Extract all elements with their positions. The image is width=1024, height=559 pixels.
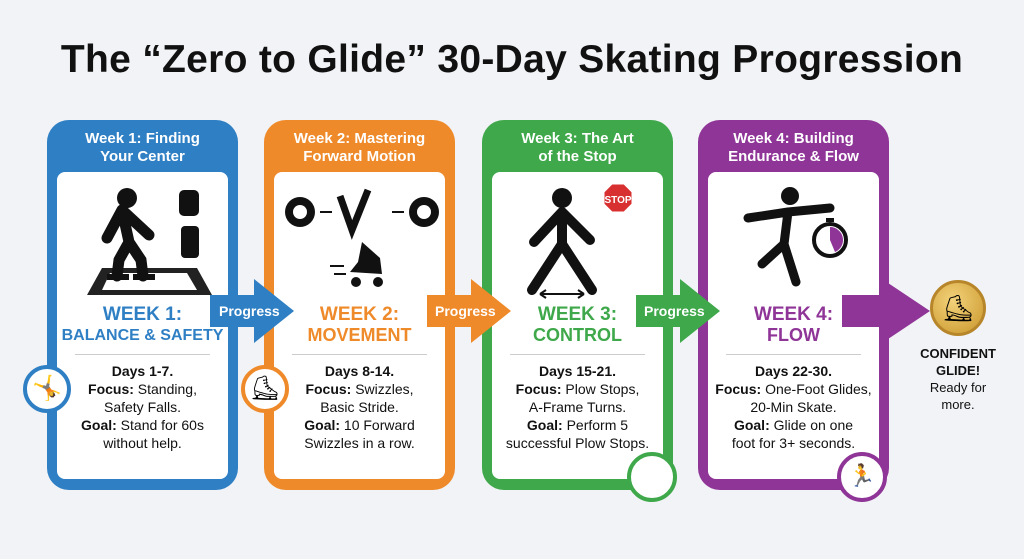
arrow: progress 3: Progress <box>644 303 705 319</box>
text: confident glide: GLIDE! <box>936 363 980 378</box>
text: week 2 details <box>304 363 415 451</box>
text: confident glide: more. <box>941 397 975 412</box>
heading: week 3 control: WEEK 3: <box>538 304 617 325</box>
text: week 1 details: Days 1-7. <box>112 363 173 379</box>
icon: fall badge <box>23 365 71 413</box>
text: week 3 details: Days 15-21. <box>539 363 616 379</box>
heading: week 2 movement: WEEK 2: <box>320 304 399 325</box>
heading: week 4: Endurance & Flow <box>728 148 859 165</box>
text: week 1 details: Goal: Stand for 60s <box>81 417 204 433</box>
text: week 4 details: foot for 3+ seconds. <box>732 435 855 451</box>
text: confident glide: Ready for <box>930 380 986 395</box>
heading: week 2 <box>294 130 425 165</box>
text: week 4 details: 20-Min Skate. <box>750 399 837 415</box>
text: week 3 details: A-Frame Turns. <box>529 399 626 415</box>
text: confident glide <box>920 346 996 412</box>
text: week 1 details: Focus: Standing, <box>88 381 197 397</box>
heading: week 2: Week 2: Mastering <box>294 130 425 147</box>
text: week 1 details: Safety Falls. <box>104 399 181 415</box>
heading: week 1: Week 1: Finding <box>85 130 200 147</box>
heading: week 2 movement: MOVEMENT <box>307 325 412 345</box>
heading: week 2: Forward Motion <box>303 148 416 165</box>
text: week 2 details: Focus: Swizzles, <box>305 381 414 397</box>
heading: week 3: of the Stop <box>538 148 617 165</box>
arrow: progress 2: Progress <box>435 303 496 319</box>
text: week 3 details: Goal: Perform 5 <box>527 417 628 433</box>
text: week 2 details: Days 8-14. <box>325 363 394 379</box>
heading: week 4 flow <box>754 304 833 345</box>
heading: week 1 balance <box>62 304 224 344</box>
heading: week 4 <box>728 130 859 165</box>
heading: week 3 control <box>533 304 622 345</box>
arrow: progress 1 <box>210 279 294 343</box>
text: week 4 details: Focus: One-Foot Glides, <box>715 381 872 397</box>
heading: week 1 <box>85 130 200 165</box>
icon: week 3 badge <box>627 452 677 502</box>
text: week 1 details <box>81 363 204 451</box>
icon: plow stop figure: STOP <box>604 195 632 206</box>
heading: week 4: Week 4: Building <box>733 130 854 147</box>
text: week 4 details: Days 22-30. <box>755 363 832 379</box>
icon: swizzle wheels <box>285 188 439 287</box>
icon: gold medal: ⛸ <box>941 293 974 323</box>
icon: skater badge: ⛸ <box>250 375 280 402</box>
text: week 4 details: Goal: Glide on one <box>734 417 853 433</box>
arrow: progress 2 <box>427 279 511 343</box>
title: The “Zero to Glide” 30-Day Skating Progression <box>61 38 963 81</box>
panel: week 2 <box>264 120 455 490</box>
icon: plow stop figure <box>527 184 632 299</box>
heading: week 1: Your Center <box>100 148 185 165</box>
arrow: final <box>842 284 930 338</box>
heading: week 3: Week 3: The Art <box>521 130 634 147</box>
heading: week 1 balance: WEEK 1: <box>103 304 182 325</box>
text: confident glide: CONFIDENT <box>920 346 996 361</box>
panel: week 4 <box>698 120 889 490</box>
heading: week 1 balance: BALANCE & SAFETY <box>62 327 223 344</box>
text: week 2 details: Swizzles in a row. <box>304 435 415 451</box>
heading: week 4 flow: WEEK 4: <box>754 304 833 325</box>
panel: week 1 <box>47 120 238 490</box>
icon: skater badge <box>241 365 289 413</box>
icon: gold medal <box>930 280 986 336</box>
heading: week 2 movement <box>307 304 412 345</box>
text: week 3 details: successful Plow Stops. <box>506 435 649 451</box>
text: week 1 details: without help. <box>103 435 182 451</box>
heading: week 3 <box>521 130 634 165</box>
text: week 2 details: Basic Stride. <box>320 399 399 415</box>
icon: week 4 badge: 🏃 <box>848 463 876 488</box>
icon: week 4 badge <box>837 452 887 502</box>
arrow: progress 1: Progress <box>219 303 280 319</box>
icon: fall badge: 🤸 <box>32 375 62 402</box>
heading: week 3 control: CONTROL <box>533 325 622 345</box>
text: week 3 details: Focus: Plow Stops, <box>516 381 639 397</box>
heading: week 4 flow: FLOW <box>767 325 820 345</box>
icon: skater on mat with pads <box>87 188 212 295</box>
icon: gliding skater with stopwatch <box>744 187 848 286</box>
arrow: progress 3 <box>636 279 720 343</box>
panel: week 3 <box>482 120 673 490</box>
text: week 3 details <box>506 363 649 451</box>
text: week 2 details: Goal: 10 Forward <box>304 417 415 433</box>
text: week 4 details <box>715 363 872 451</box>
